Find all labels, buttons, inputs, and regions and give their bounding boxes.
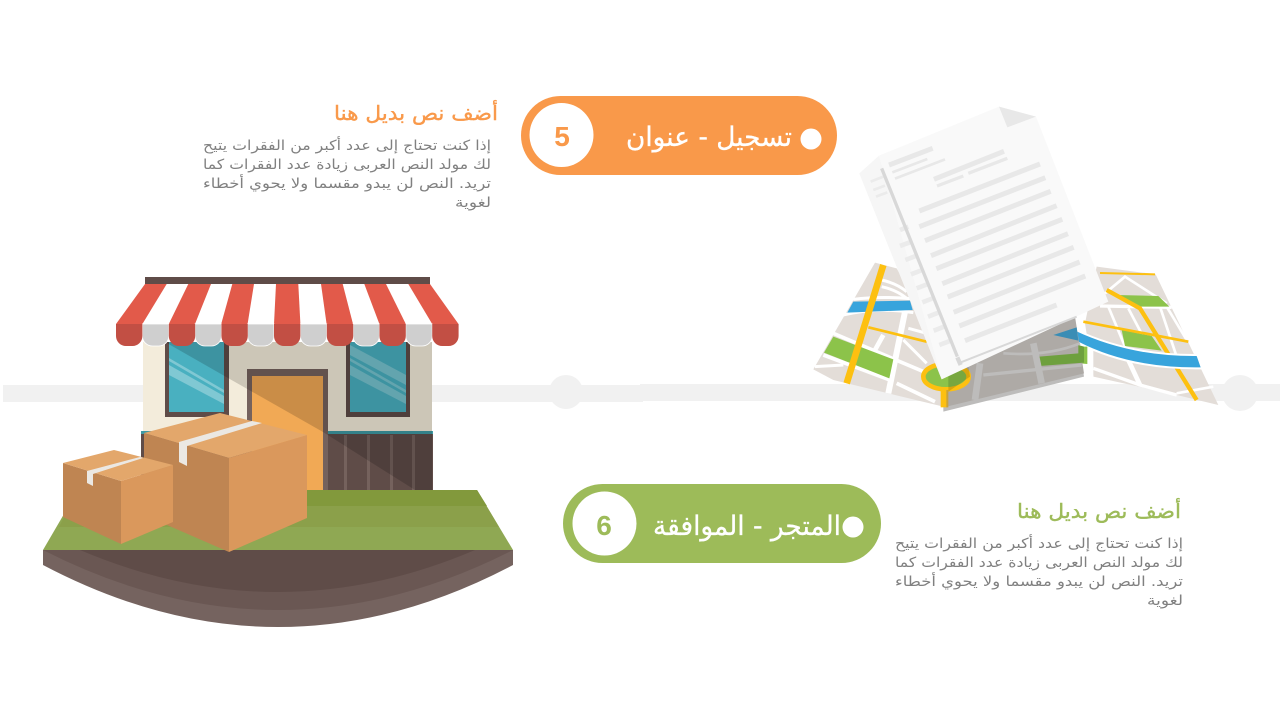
shop building xyxy=(141,342,433,490)
text block: step 5 xyxy=(203,100,498,211)
large box xyxy=(144,413,307,552)
pill: step 6 xyxy=(563,484,881,563)
number 6: 6 xyxy=(596,510,612,541)
body 5: لك مولد النص العربى زيادة عدد الفقرات كما xyxy=(203,157,491,173)
heading 5: أضف نص بديل هنا xyxy=(334,100,498,125)
body 5 xyxy=(203,136,491,211)
pill: step 5 xyxy=(521,96,837,175)
map right panel xyxy=(1075,267,1218,405)
grass xyxy=(43,490,513,550)
body 6 xyxy=(895,534,1183,609)
small box xyxy=(63,450,173,544)
document back sheet xyxy=(859,157,1000,379)
text block: step 6 xyxy=(895,498,1183,609)
body 5: إذا كنت تحتاج إلى عدد أكبر من الفقرات يتيح xyxy=(203,136,491,154)
illustration: map and document xyxy=(813,107,1218,412)
door xyxy=(247,369,328,490)
right window xyxy=(346,342,410,417)
map left panel xyxy=(813,263,947,407)
pill heading 5: تسجيل - عنوان xyxy=(626,122,792,153)
heading 6: أضف نص بديل هنا xyxy=(1017,498,1181,523)
illustration: shop with boxes xyxy=(43,277,513,627)
ground base xyxy=(43,550,513,627)
pill heading 6: المتجر - الموافقة xyxy=(653,511,841,542)
body 6: تريد. النص لن يبدو مقسما ولا يحوي أخطاء xyxy=(895,572,1183,590)
body 6: لغوية xyxy=(1147,593,1183,609)
body 5: تريد. النص لن يبدو مقسما ولا يحوي أخطاء xyxy=(203,174,491,192)
left window xyxy=(165,342,229,417)
body 6: لك مولد النص العربى زيادة عدد الفقرات كما xyxy=(895,555,1183,571)
map centre panel xyxy=(923,317,1084,412)
awning xyxy=(116,277,459,346)
timeline band xyxy=(3,375,1280,411)
body 6: إذا كنت تحتاج إلى عدد أكبر من الفقرات يتيح xyxy=(895,534,1183,552)
document main sheet xyxy=(859,107,1108,379)
number 5: 5 xyxy=(554,121,570,152)
body 5: لغوية xyxy=(455,195,491,211)
